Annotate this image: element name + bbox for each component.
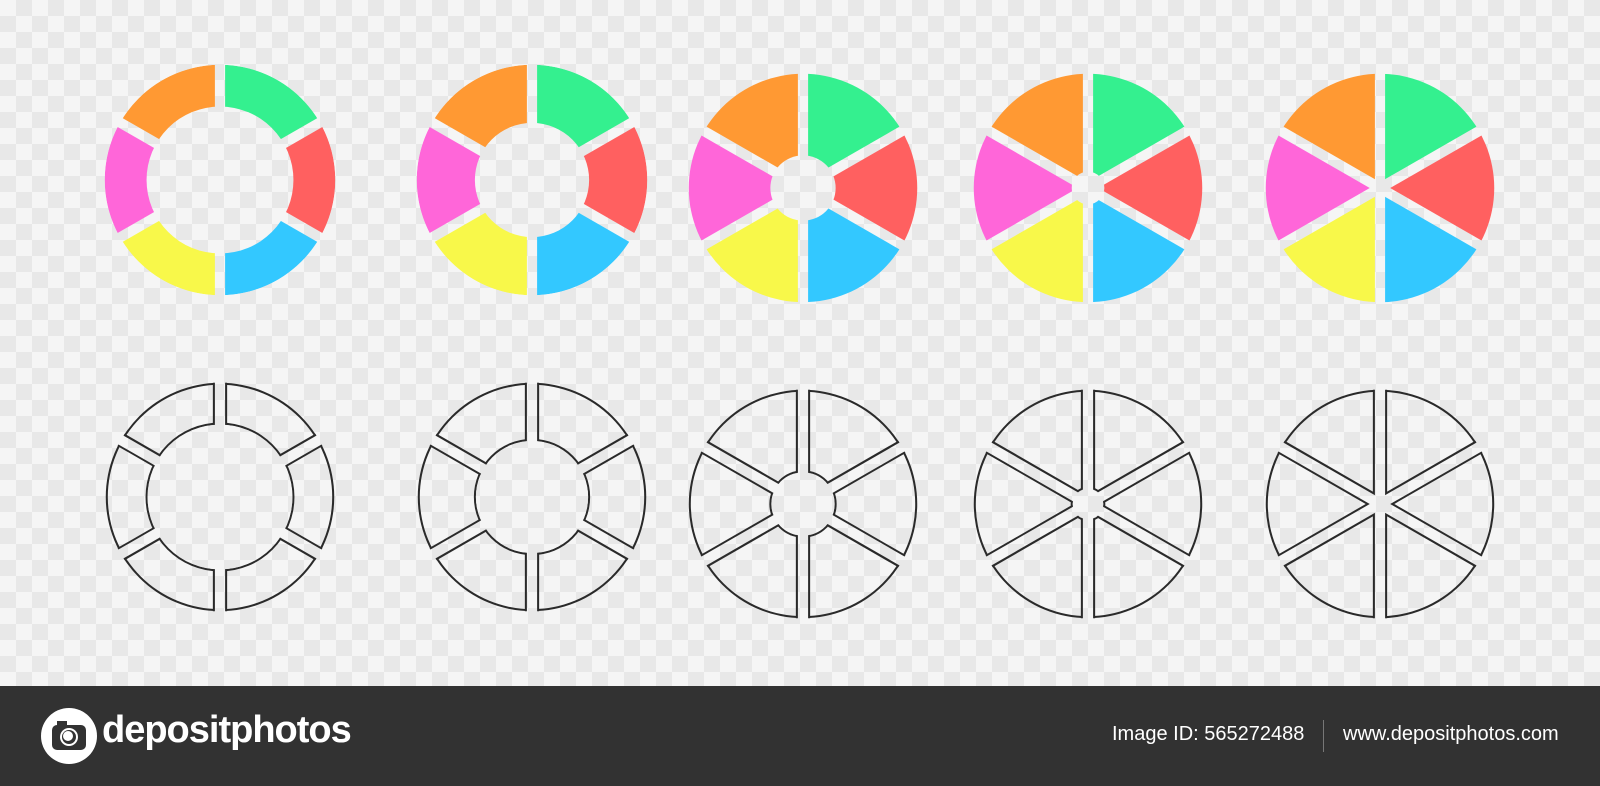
colored pie 5 [1265,73,1495,303]
colored donut 2 [417,65,647,295]
colored donut 1 [105,65,335,295]
colored donut 3 [688,73,918,303]
colored donut 4 [973,73,1203,303]
image id: Image ID: 565272488 [1112,723,1304,745]
outline pie 5 [1266,390,1494,618]
outline donut 1 [106,382,334,612]
website url: www.depositphotos.com [1343,723,1559,745]
logo icon: camera [41,708,97,764]
outline donut 4 [974,390,1202,618]
charts [104,64,1494,618]
outline donut 3 [688,390,918,618]
logo text: depositphotos [102,709,351,751]
outline donut 2 [418,382,646,612]
footer bar [0,686,1600,786]
